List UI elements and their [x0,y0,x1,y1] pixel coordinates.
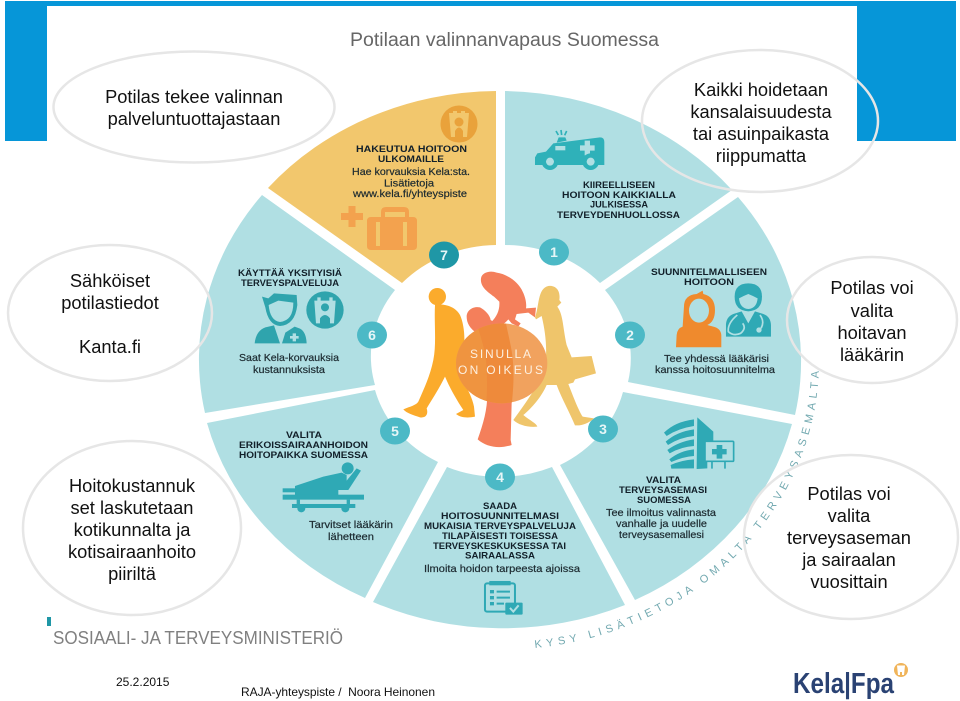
callout: choose health centre and hospital yearly: vuosittain [810,571,888,592]
text: choose health centre: terveysasemallesi [619,529,704,541]
icon: health centre building [664,417,734,469]
text: choose health centre: VALITA [646,475,681,486]
text: care elsewhere: SAIRAALASSA [465,550,535,562]
text: care elsewhere: TILAPÄISESTI TOISESSA [442,531,558,542]
badge 7: 7 [440,247,448,263]
ministry logo: SOSIAALI- JA TERVEYSMINISTERIÖ [53,628,343,648]
text: care elsewhere: TERVEYSKESKUKSESSA TAI [433,541,566,552]
text: urgent care: HOITOON KAIKKIALLA [562,190,676,201]
badge 2 [615,322,645,348]
callout: electronic patient records: potilastiedot [61,292,159,313]
text: urgent care: JULKISESSA [590,200,648,210]
callout: patient chooses provider: palveluntuottajastaan [108,108,280,129]
segment 6: private care [199,195,395,413]
icon: private doctor and Kela emblem [255,291,344,343]
text: treatment abroad: Lisätietoja [384,178,434,190]
text: choose health centre: Tee ilmoitus valinnasta [606,507,716,519]
callout: choose health centre and hospital yearly: ja sairaalan [801,549,896,570]
segment 7: treatment abroad [268,91,496,283]
segment 2: planned care [605,197,801,415]
icon: care plan clipboard [485,581,523,615]
text: planned care: Tee yhdessä lääkärisi [664,353,769,365]
silhouette: man walking [403,288,475,417]
text: care elsewhere: MUKAISIA TERVEYSPALVELUJA [424,521,576,532]
text: specialist care: VALITA [286,430,322,441]
icon: suitcase and plus [341,206,417,250]
callout: electronic patient records: Sähköiset [70,270,150,291]
callout: patient chooses provider: Potilas tekee valinnan [105,86,283,107]
curved text around wheel: KYSY LISÄTIETOJA OMALTA TERVEYSASEMALTASI [534,371,819,648]
silhouette: mother [467,307,514,447]
text: care elsewhere [424,501,580,575]
callout: choose health centre and hospital yearly: valita [828,505,871,526]
text: specialist care: Tarvitset lääkärin [309,519,393,531]
callout: costs billed from municipality: Hoitokustannuk [69,475,196,496]
callout: choose treating doctor [787,257,957,383]
callout: choose health centre and hospital yearly [744,455,958,619]
text: choose health centre: vanhalle ja uudelle [616,518,707,530]
badge 6: 6 [368,327,376,343]
callout: choose health centre and hospital yearly: terveysaseman [787,527,911,548]
segment 3: choose health centre [560,392,792,600]
badge 6 [357,322,387,348]
text: choose health centre: TERVEYSASEMASI [619,485,707,496]
text: specialist care: HOITOPAIKKA SUOMESSA [239,450,368,461]
text: private care: TERVEYSPALVELUJA [241,278,339,289]
badge 7 [429,242,459,268]
text: urgent care [557,180,680,221]
text: treatment abroad: ULKOMAILLE [378,154,444,165]
text: treatment abroad: Hae korvauksia Kela:sta. [352,166,470,178]
text: planned care: HOITOON [684,277,734,288]
Kela Fpa logo: Kela|Fpa [793,668,895,700]
curved text around wheel [534,371,819,648]
text: specialist care: ERIKOISSAIRAANHOIDON [239,440,368,451]
badge 5: 5 [391,423,399,439]
ministry logo [47,617,343,648]
globe overlap: man, darker left lobe [456,327,487,403]
text: choose health centre: SUOMESSA [637,495,691,506]
callout: choose treating doctor: valita [851,300,894,321]
text: treatment abroad: www.kela.fi/yhteyspiste [352,188,467,200]
text: treatment abroad: HAKEUTUA HOITOON [356,144,467,155]
badge 1: 1 [550,244,558,260]
callout: costs billed from municipality: kotisairaanhoito [68,541,196,562]
text: care elsewhere: SAADA [483,501,517,512]
footer presenter: RAJA-yhteyspiste / Noora Heinonen [241,685,435,699]
label: Sinulla on oikeus [458,347,543,377]
callout: electronic patient records: Kanta.fi [79,336,141,357]
callout: treated regardless of citizenship: tai asuinpaikasta [693,123,830,144]
callout: treated regardless of citizenship: riippumatta [716,145,807,166]
label: Sinulla on oikeus: ON OIKEUS [458,363,543,377]
text: private care: kustannuksista [253,364,325,376]
callout: treated regardless of citizenship: Kaikki hoidetaan [694,79,828,100]
callout: electronic patient records [8,245,212,381]
text: private care: KÄYTTÄÄ YKSITYISIÄ [238,268,342,279]
segment 5: specialist care [207,390,438,598]
text: urgent care: KIIREELLISEEN [583,180,655,191]
callout: choose health centre and hospital yearly: Potilas voi [807,483,891,504]
icon: patient and doctor [676,283,771,347]
text: specialist care [239,430,393,543]
text: specialist care: lähetteen [328,531,374,543]
badge 2: 2 [626,327,634,343]
text: planned care: kanssa hoitosuunnitelma [655,364,775,376]
text: care elsewhere: Ilmoita hoidon tarpeesta ajoissa [424,563,580,575]
text: private care [238,268,342,376]
callout: patient chooses provider [54,52,334,162]
badge 3 [588,416,618,442]
callout: costs billed from municipality: piiriltä [108,563,157,584]
badge 1 [539,238,569,266]
silhouette: child held up [481,272,536,327]
callout: choose treating doctor: hoitavan [837,322,907,343]
badge 3: 3 [599,421,607,437]
number badges [357,238,645,490]
text: care elsewhere: HOITOSUUNNITELMASI [441,511,559,522]
badge 5 [380,418,410,444]
footer date: 25.2.2015 [116,675,170,689]
globe overlap: mother, darker band [477,323,514,407]
icon: Kela emblem, orange [440,106,478,142]
silhouette: woman with briefcase [513,286,596,427]
text: choose health centre [606,475,716,541]
callout: choose treating doctor: lääkärin [840,344,904,365]
text: private care: Saat Kela-korvauksia [239,352,339,364]
callout: costs billed from municipality: set laskutetaan [71,497,193,518]
text: urgent care: TERVEYDENHUOLLOSSA [557,210,680,221]
segment 1: urgent care [505,91,732,283]
text: planned care: SUUNNITELMALLISEEN [651,267,767,278]
slide frame: blue corner blocks and top bar [5,1,956,141]
centre illustration: walking family and "Sinulla on oikeus" [403,272,596,447]
segment 4: care elsewhere temporarily [373,467,625,628]
text: planned care [651,267,775,376]
globe [456,323,547,403]
label: Sinulla on oikeus: SINULLA [470,347,531,361]
icon: hospital bed [283,462,364,512]
badge 4 [485,464,515,490]
badge 4: 4 [496,469,504,485]
icon: ambulance [535,130,604,170]
callout: choose treating doctor: Potilas voi [830,277,914,298]
text: treatment abroad [352,144,470,200]
callout: costs billed from municipality [23,441,241,615]
title: Potilaan valinnanvapaus Suomessa [350,30,659,51]
callout: treated regardless of citizenship: kansalaisuudesta [690,101,832,122]
callout: costs billed from municipality: kotikunnalta ja [74,519,191,540]
silhouettes and globe [403,272,596,447]
callout: treated regardless of citizenship [642,50,878,192]
